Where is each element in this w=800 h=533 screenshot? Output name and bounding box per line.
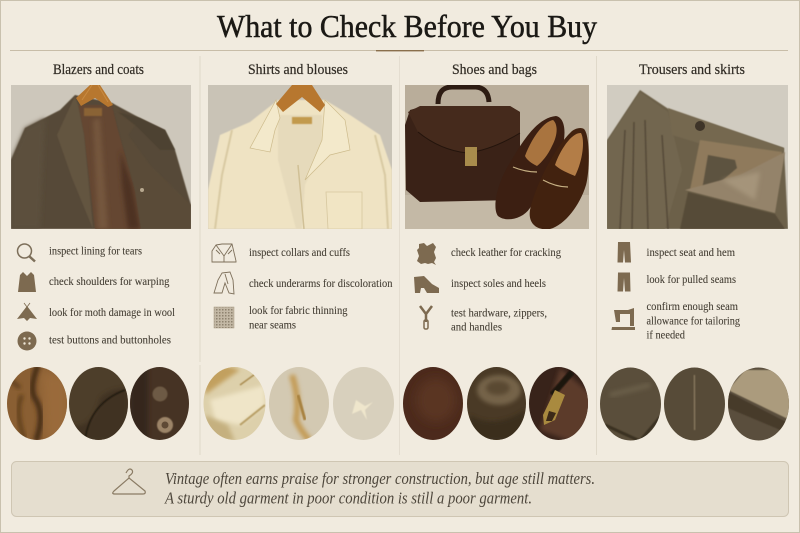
photo: leather briefcase and loafers bbox=[405, 85, 589, 229]
detail: jacket buttons bbox=[129, 365, 191, 441]
item: seam allowance bbox=[646, 301, 740, 342]
detail: stained collar bbox=[203, 365, 267, 441]
photo: cream blouse on wooden hanger bbox=[208, 85, 392, 229]
detail: pulled seam bbox=[664, 367, 726, 441]
checklist: shoes and bags bbox=[414, 243, 561, 334]
detail: brass zipper pull bbox=[529, 367, 588, 440]
item: seam allowance: allowance for tailoring bbox=[646, 316, 740, 328]
item: check shoulders: check shoulders for warping bbox=[49, 276, 170, 288]
item: test hardware bbox=[451, 308, 547, 334]
icon: button bbox=[18, 332, 36, 350]
item: inspect soles: inspect soles and heels bbox=[451, 278, 546, 290]
panel: blazers and coats bbox=[5, 62, 191, 441]
heading: blazers and coats: Blazers and coats bbox=[53, 62, 144, 78]
icon: sewing machine bbox=[612, 308, 635, 330]
item: look for moth damage: look for moth damage in wool bbox=[49, 307, 175, 319]
title: What to Check Before You Buy bbox=[217, 8, 597, 44]
item: test hardware: and handles bbox=[451, 322, 502, 334]
icon: shoe bbox=[414, 276, 439, 293]
callout: vintage caveat bbox=[12, 462, 788, 516]
heading: shirts and blouses: Shirts and blouses bbox=[248, 62, 348, 78]
detail: underarm discoloration bbox=[268, 365, 330, 441]
icon: magnifying glass bbox=[18, 244, 35, 262]
icon: hanger bbox=[113, 469, 145, 494]
icon: jacket bbox=[18, 272, 36, 292]
detail: worn seat fabric bbox=[600, 367, 662, 441]
detail: hem allowance bbox=[728, 367, 790, 441]
icon: pulled seams trousers bbox=[618, 272, 630, 292]
item: seam allowance: confirm enough seam bbox=[646, 301, 738, 313]
callout text bbox=[164, 469, 595, 508]
item: fabric thinning bbox=[249, 305, 348, 332]
item: test hardware: test hardware, zippers, bbox=[451, 308, 547, 320]
icon: zipper bbox=[420, 306, 432, 329]
detail: cracked leather bbox=[402, 365, 464, 441]
item: inspect seat: inspect seat and hem bbox=[646, 247, 735, 259]
detail: torn lining bbox=[7, 367, 67, 440]
icon: collar outline bbox=[212, 244, 236, 262]
panel: shirts and blouses bbox=[203, 62, 395, 441]
checklist: shirts and blouses bbox=[212, 244, 393, 332]
icon: moth bbox=[17, 303, 37, 321]
item: inspect lining: inspect lining for tears bbox=[49, 246, 142, 258]
icon: leather hide bbox=[417, 243, 436, 265]
item: test buttons: test buttons and buttonholes bbox=[49, 334, 171, 346]
callout text: A sturdy old garment in poor condition is still a poor garment. bbox=[164, 488, 532, 508]
panel: trousers and skirts bbox=[600, 62, 790, 441]
panel: shoes and bags bbox=[402, 62, 592, 441]
heading: shoes and bags: Shoes and bags bbox=[452, 62, 537, 78]
detail: thinning fabric bbox=[332, 365, 395, 441]
callout text: Vintage often earns praise for stronger construction, but age still matters. bbox=[165, 469, 595, 488]
heading: trousers and skirts: Trousers and skirts bbox=[639, 62, 745, 78]
item: check underarms: check underarms for discoloration bbox=[249, 278, 393, 290]
item: pulled seams: look for pulled seams bbox=[646, 274, 736, 286]
photo: tweed blazer on wooden hanger bbox=[11, 85, 191, 229]
checklist: blazers and coats bbox=[17, 244, 175, 350]
item: check leather: check leather for cracking bbox=[451, 247, 561, 259]
detail: worn sole bbox=[466, 365, 528, 441]
item: seam allowance: if needed bbox=[646, 330, 685, 342]
icon: fabric weave swatch bbox=[214, 307, 234, 328]
item: fabric thinning: look for fabric thinning bbox=[249, 305, 348, 317]
item: fabric thinning: near seams bbox=[249, 320, 296, 332]
detail: tweed shoulder bbox=[68, 365, 130, 441]
item: inspect collars: inspect collars and cuffs bbox=[249, 247, 350, 259]
icon: shirt outline bbox=[214, 272, 234, 294]
photo: pleated trousers with open waistband bbox=[607, 85, 788, 229]
icon: trousers bbox=[618, 242, 631, 262]
checklist: trousers and skirts bbox=[612, 242, 740, 342]
